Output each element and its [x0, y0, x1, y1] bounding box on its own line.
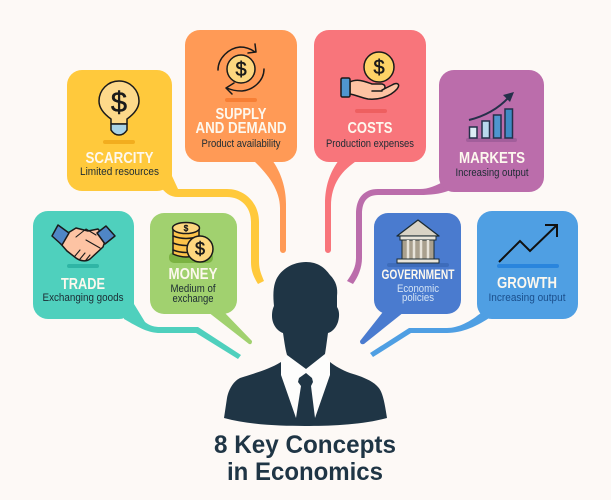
icon: light bulb: $ [111, 87, 127, 119]
icon: light bulb [99, 81, 139, 135]
icon: handshake [52, 225, 115, 261]
icon: bank building [387, 220, 449, 267]
icon: circular arrows and coin [218, 44, 264, 94]
card: costs [314, 30, 426, 162]
heading: supply and demand: SUPPLY [216, 106, 267, 123]
card: markets [439, 70, 544, 192]
card: growth [477, 211, 578, 319]
heading: money: MONEY [168, 266, 218, 283]
icon: coins: $ [184, 224, 189, 233]
heading: trade: TRADE [61, 276, 105, 293]
heading: costs: COSTS [348, 120, 392, 137]
card: supply and demand [185, 30, 297, 162]
panel: money [150, 213, 252, 344]
panel: costs [314, 30, 426, 253]
text: supply description: Product availability [202, 138, 281, 150]
icon: rising bar chart [466, 92, 517, 142]
title [214, 431, 396, 486]
heading: markets: MARKETS [459, 150, 525, 167]
text: money description: Medium of [170, 283, 216, 295]
panel: government: policies [402, 292, 434, 304]
card: scarcity [67, 70, 172, 191]
text: scarcity description: Limited resources [80, 166, 159, 178]
heading: scarcity: SCARCITY [86, 150, 154, 167]
title: in Economics [227, 458, 383, 486]
icon: circular arrows and coin: $ [235, 59, 247, 81]
icon: hand holding coin [341, 52, 399, 99]
text: government description: Economic [397, 283, 439, 295]
panel: scarcity [67, 70, 264, 284]
icon: growth arrow [499, 225, 557, 262]
card: government [374, 213, 461, 314]
panel: government [360, 213, 461, 344]
panel: markets [347, 70, 544, 284]
figure: businessman silhouette [224, 262, 387, 426]
panel: growth [370, 211, 578, 357]
icon: hand holding coin: $ [373, 57, 385, 79]
icon: coins [169, 222, 213, 263]
text: growth description: Increasing output [488, 292, 566, 304]
panel: supply and demand [185, 30, 297, 253]
title: 8 Key Concepts [214, 431, 396, 459]
heading: growth: GROWTH [497, 275, 557, 292]
panel: supply and demand: AND DEMAND [196, 120, 286, 137]
card: money [150, 213, 237, 314]
text: costs description: Production expenses [326, 138, 414, 150]
heading: government: GOVERNMENT [382, 267, 455, 282]
text: trade description: Exchanging goods [42, 292, 124, 304]
card: trade [33, 211, 134, 319]
panel: money: exchange [172, 293, 214, 305]
icon: coins: $ [195, 239, 205, 259]
panel: trade [33, 211, 241, 359]
text: markets description: Increasing output [456, 167, 528, 179]
